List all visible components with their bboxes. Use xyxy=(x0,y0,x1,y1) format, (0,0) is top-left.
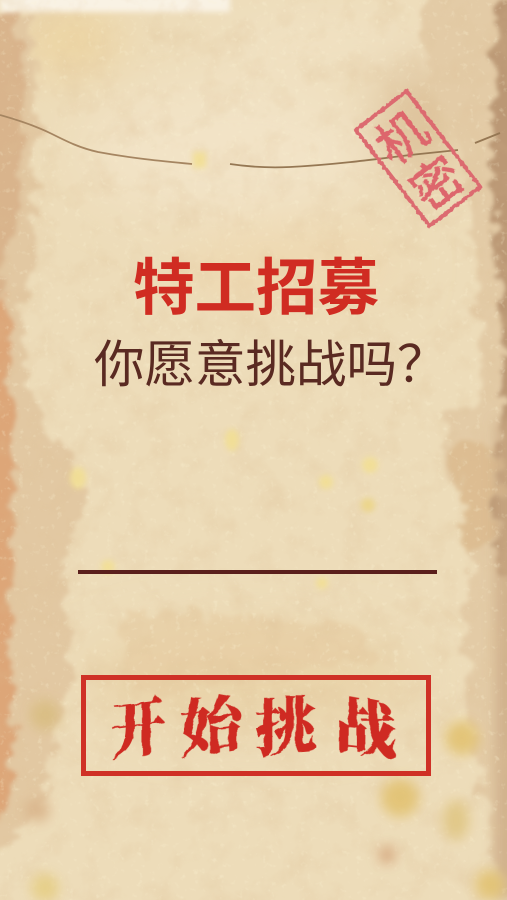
start challenge button xyxy=(81,675,431,776)
stamp text: 机: 机 xyxy=(358,91,442,179)
subtitle: 你愿意挑战吗？ xyxy=(94,336,448,393)
button label: 战: 战 xyxy=(335,677,397,772)
divider line xyxy=(78,570,437,574)
crease line right xyxy=(230,133,500,167)
stamp text: 密: 密 xyxy=(394,137,477,225)
button label: 始: 始 xyxy=(180,673,242,770)
title: 特工招募 xyxy=(133,254,379,323)
button label: 开: 开 xyxy=(110,676,166,771)
stamp xyxy=(353,88,483,229)
crease line left xyxy=(0,115,192,164)
button label: 挑: 挑 xyxy=(255,675,317,770)
